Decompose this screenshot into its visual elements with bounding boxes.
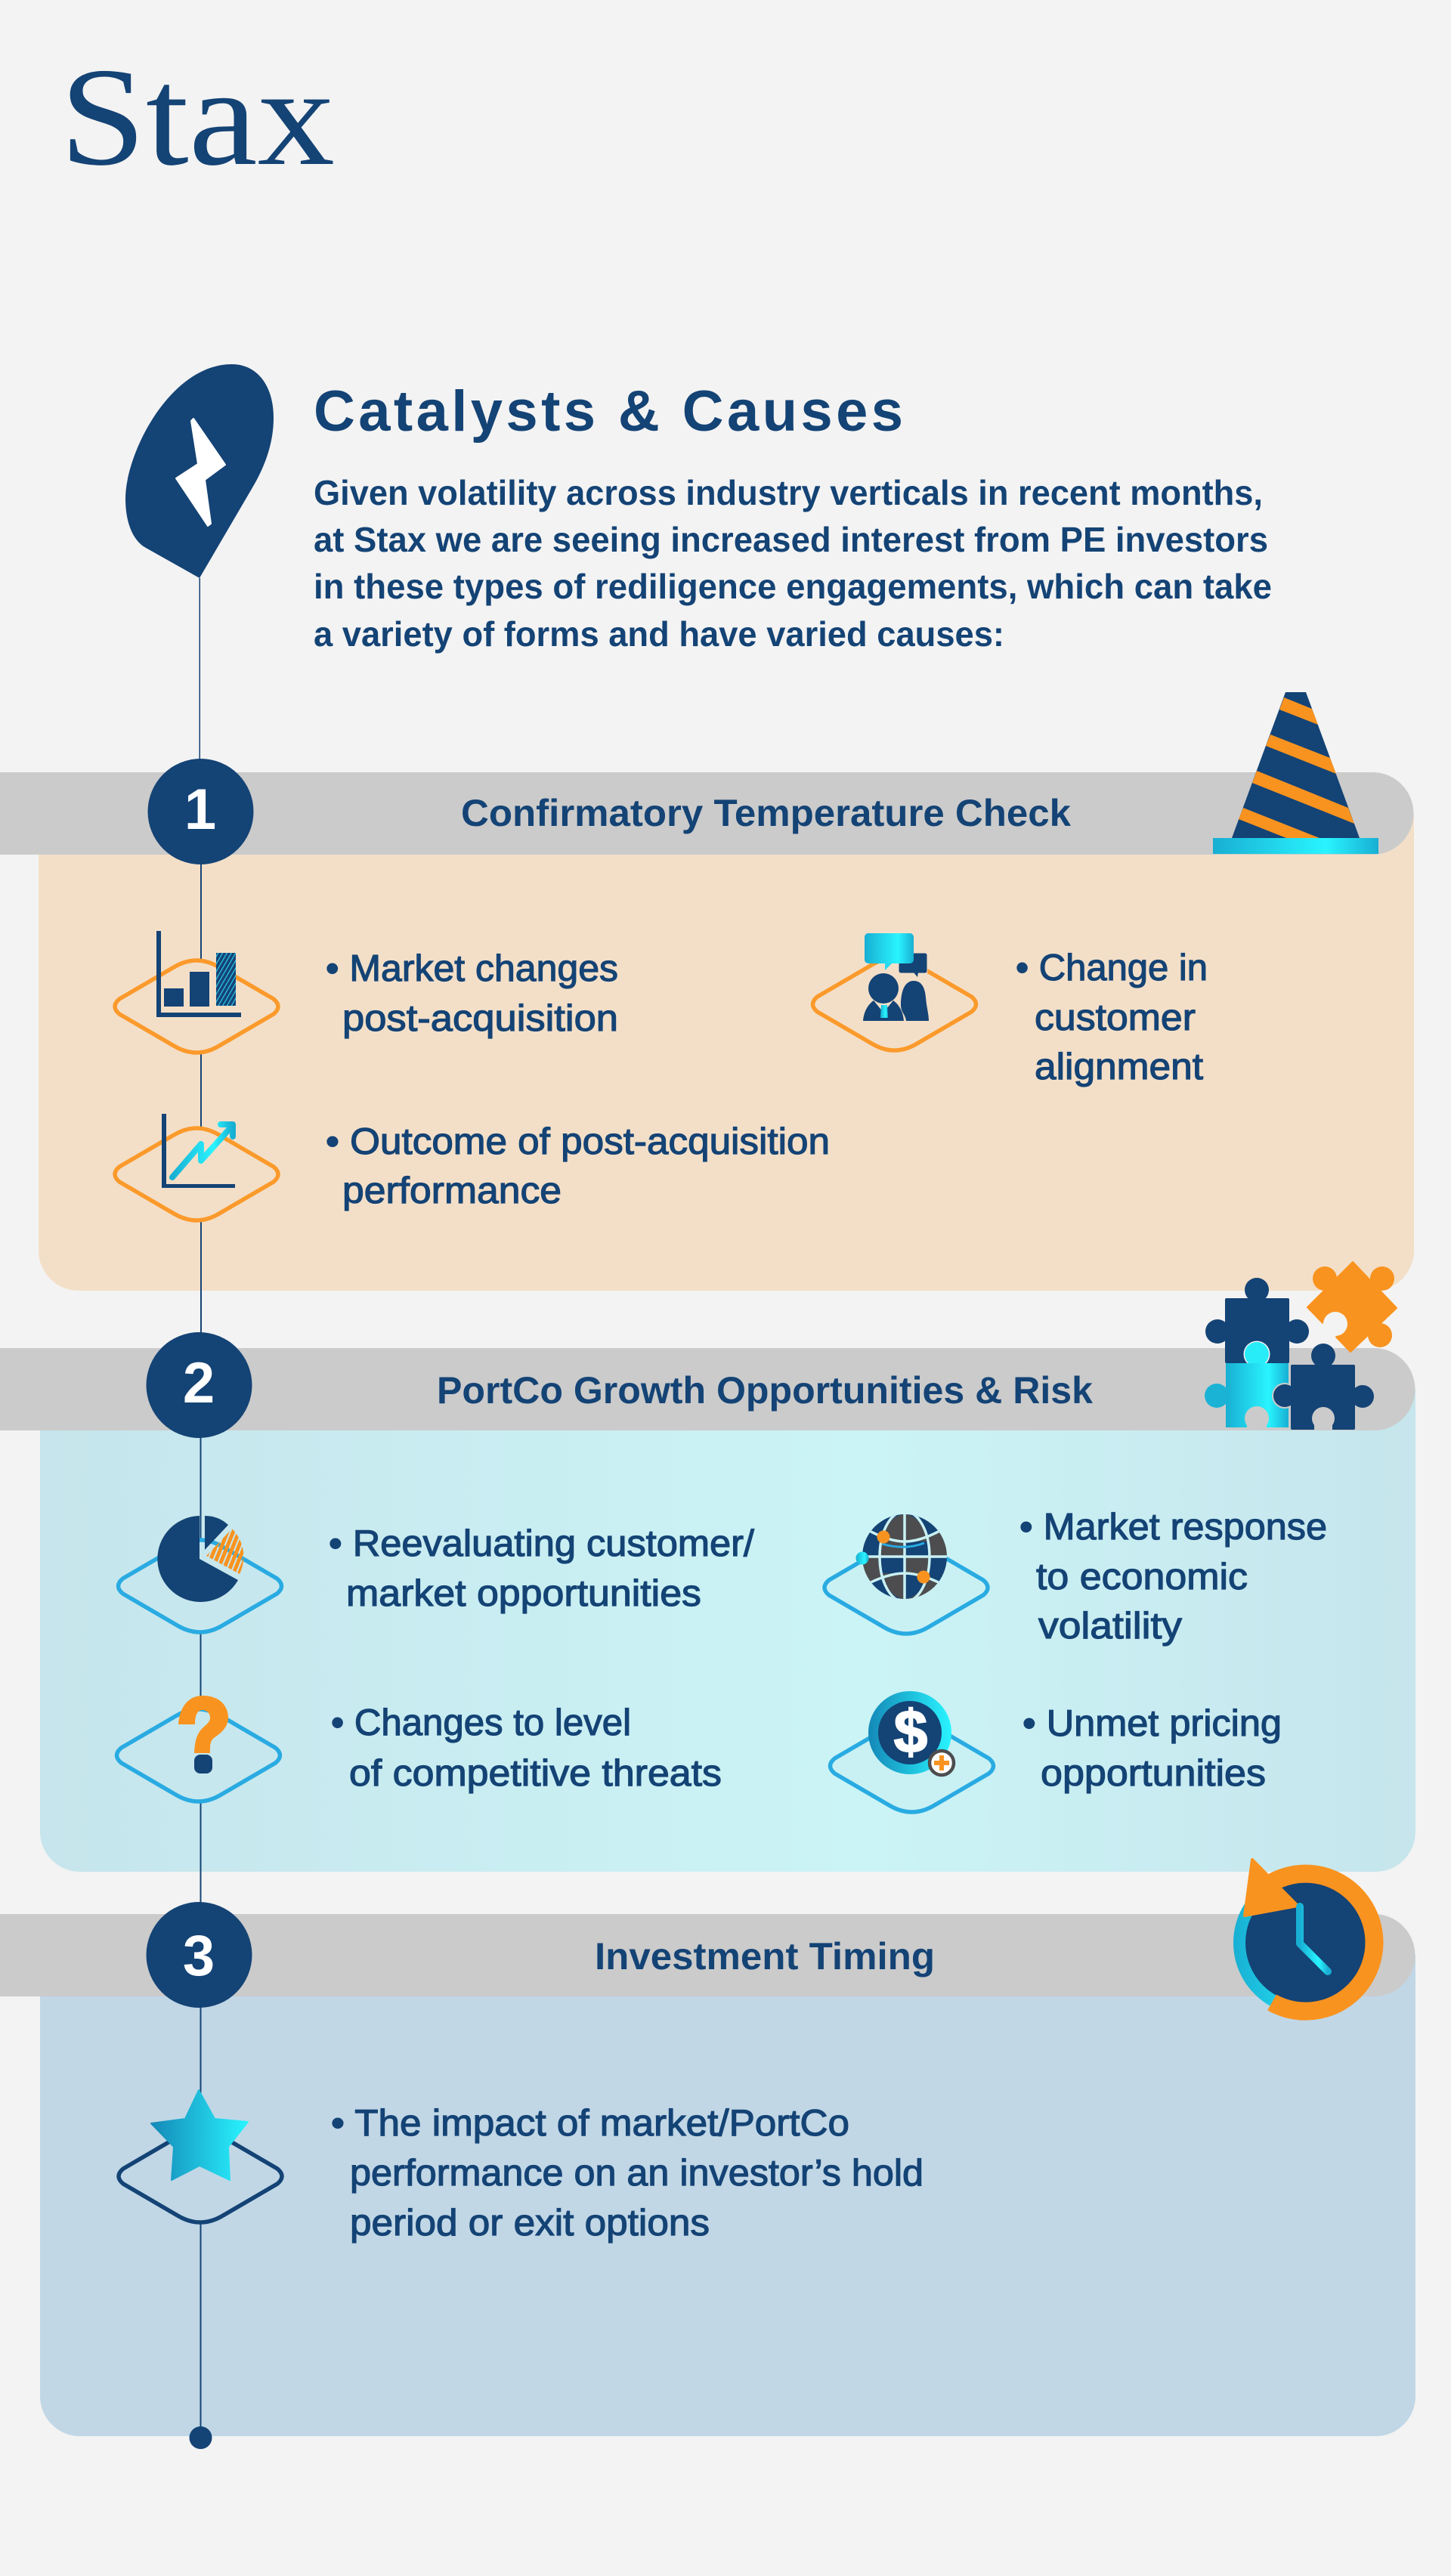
heading: Investment Timing: Investment Timing bbox=[595, 1935, 935, 1978]
text: Unmet pricing opportunities bbox=[1023, 1703, 1282, 1794]
text: Reevaluating customer/market opportunities: market opportunities bbox=[346, 1573, 701, 1614]
text: Unmet pricing opportunities: opportunities bbox=[1041, 1753, 1266, 1794]
logo: Stax: Stax bbox=[60, 39, 335, 195]
icon: globe in diamond bbox=[825, 1511, 988, 1634]
text: The impact of market/PortCo performance: • The impact of market/PortCo bbox=[331, 2103, 849, 2144]
text: The impact of market/PortCo performance: period or exit options bbox=[350, 2203, 710, 2244]
intro text block: in these types of rediligence engagements, which can take bbox=[314, 567, 1272, 606]
icon: star in diamond bbox=[119, 2090, 282, 2222]
text: Changes to level of competitive threats: of competitive threats bbox=[349, 1753, 722, 1794]
text: Changes to level of competitive threats bbox=[331, 1702, 722, 1794]
number badge 2 bbox=[147, 1332, 252, 1438]
icon: performance arrow chart in diamond bbox=[115, 1114, 278, 1220]
panel: section 2 background bbox=[40, 1389, 1415, 1872]
text: Change in customer alignment bbox=[1016, 948, 1208, 1087]
number badge 1: 1 bbox=[184, 778, 216, 842]
intro text block: a variety of forms and have varied causes: bbox=[314, 614, 1004, 654]
band: section 2 header bbox=[0, 1348, 1415, 1430]
number badge 3: 3 bbox=[183, 1924, 215, 1988]
text: Market changes bbox=[326, 948, 618, 1039]
text: Unmet pricing opportunities: • Unmet pricing bbox=[1023, 1703, 1282, 1744]
icon: puzzle pieces bbox=[1205, 1262, 1397, 1430]
icon: market changes bar chart in diamond bbox=[115, 931, 278, 1053]
timeline end dot bbox=[189, 2426, 212, 2449]
number badge 3 bbox=[147, 1902, 252, 2008]
text: Market response to economic volatility: • Market response bbox=[1019, 1507, 1327, 1548]
band: section 3 header bbox=[0, 1914, 1415, 1996]
heading: Confirmatory Temperature Check: Confirmatory Temperature Check bbox=[461, 792, 1071, 834]
number badge 1 bbox=[148, 759, 254, 864]
text: Reevaluating customer/market opportunities: • Reevaluating customer/ bbox=[329, 1523, 754, 1564]
panel: section 1 background bbox=[39, 813, 1414, 1291]
band: section 1 header bbox=[0, 772, 1413, 855]
intro text block bbox=[314, 473, 1272, 654]
icon: dollar coin in diamond: $ bbox=[894, 1698, 927, 1765]
heading: Catalysts & Causes: Catalysts & Causes bbox=[314, 379, 903, 444]
intro text block: Given volatility across industry verticals in recent months, bbox=[314, 473, 1263, 512]
text: Changes to level of competitive threats: • Changes to level bbox=[331, 1702, 631, 1743]
text: The impact of market/PortCo performance: performance on an investor’s hold bbox=[350, 2153, 924, 2194]
text: Market changes: • Market changes bbox=[326, 948, 618, 989]
icon: dollar coin in diamond bbox=[830, 1691, 993, 1812]
text: Market response to economic volatility: to economic bbox=[1036, 1557, 1248, 1597]
text: Market changes: post-acquisition bbox=[342, 998, 618, 1039]
icon: pie chart in diamond bbox=[118, 1516, 281, 1632]
text: Outcome of post-acquisition performance: • Outcome of post-acquisition bbox=[326, 1121, 830, 1162]
text: Change in customer alignment: • Change in bbox=[1016, 948, 1208, 988]
text: Change in customer alignment: customer bbox=[1035, 997, 1196, 1038]
text: Outcome of post-acquisition performance bbox=[326, 1121, 830, 1211]
text: Outcome of post-acquisition performance: performance bbox=[342, 1170, 562, 1211]
text: Change in customer alignment: alignment bbox=[1035, 1047, 1203, 1087]
icon: question mark in diamond bbox=[116, 1696, 280, 1801]
text: Market response to economic volatility: volatility bbox=[1038, 1606, 1183, 1647]
icon: customers with speech bubbles in diamond bbox=[813, 933, 976, 1050]
text: Market response to economic volatility bbox=[1019, 1507, 1327, 1647]
icon: traffic cone bbox=[1213, 692, 1378, 854]
panel: section 3 background bbox=[40, 1955, 1415, 2436]
heading: PortCo Growth Opportunities & Risk: PortCo Growth Opportunities & Risk bbox=[437, 1369, 1093, 1412]
icon: pin with lightning bolt bbox=[125, 364, 274, 578]
text: The impact of market/PortCo performance bbox=[331, 2103, 924, 2244]
number badge 2: 2 bbox=[183, 1351, 215, 1415]
timeline vertical line bbox=[200, 578, 202, 2438]
text: Reevaluating customer/market opportunities bbox=[329, 1523, 754, 1614]
intro text block: at Stax we are seeing increased interest from PE investors bbox=[314, 520, 1268, 559]
icon: clock with circular arrow bbox=[1233, 1860, 1378, 2015]
